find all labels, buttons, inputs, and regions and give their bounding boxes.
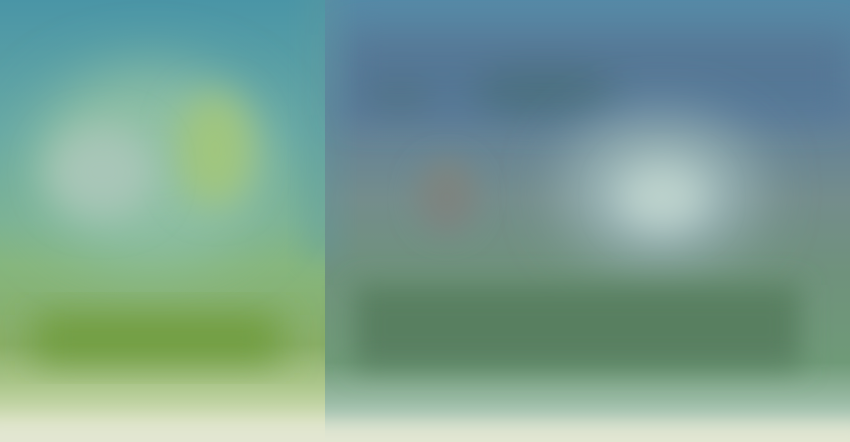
white glow halo <box>565 122 755 258</box>
dark sky band <box>345 35 850 118</box>
white glow core <box>618 165 706 229</box>
background: left panel <box>0 0 325 442</box>
pale circle core <box>48 126 156 218</box>
pale circle left <box>30 70 270 260</box>
yellow-green glow <box>177 94 253 206</box>
dark green field right <box>355 285 800 367</box>
green field left <box>35 315 280 361</box>
central brown patch <box>417 161 477 233</box>
seam softening strip <box>305 0 340 260</box>
pale foreground strip <box>0 424 850 442</box>
background: right panel <box>325 0 850 442</box>
